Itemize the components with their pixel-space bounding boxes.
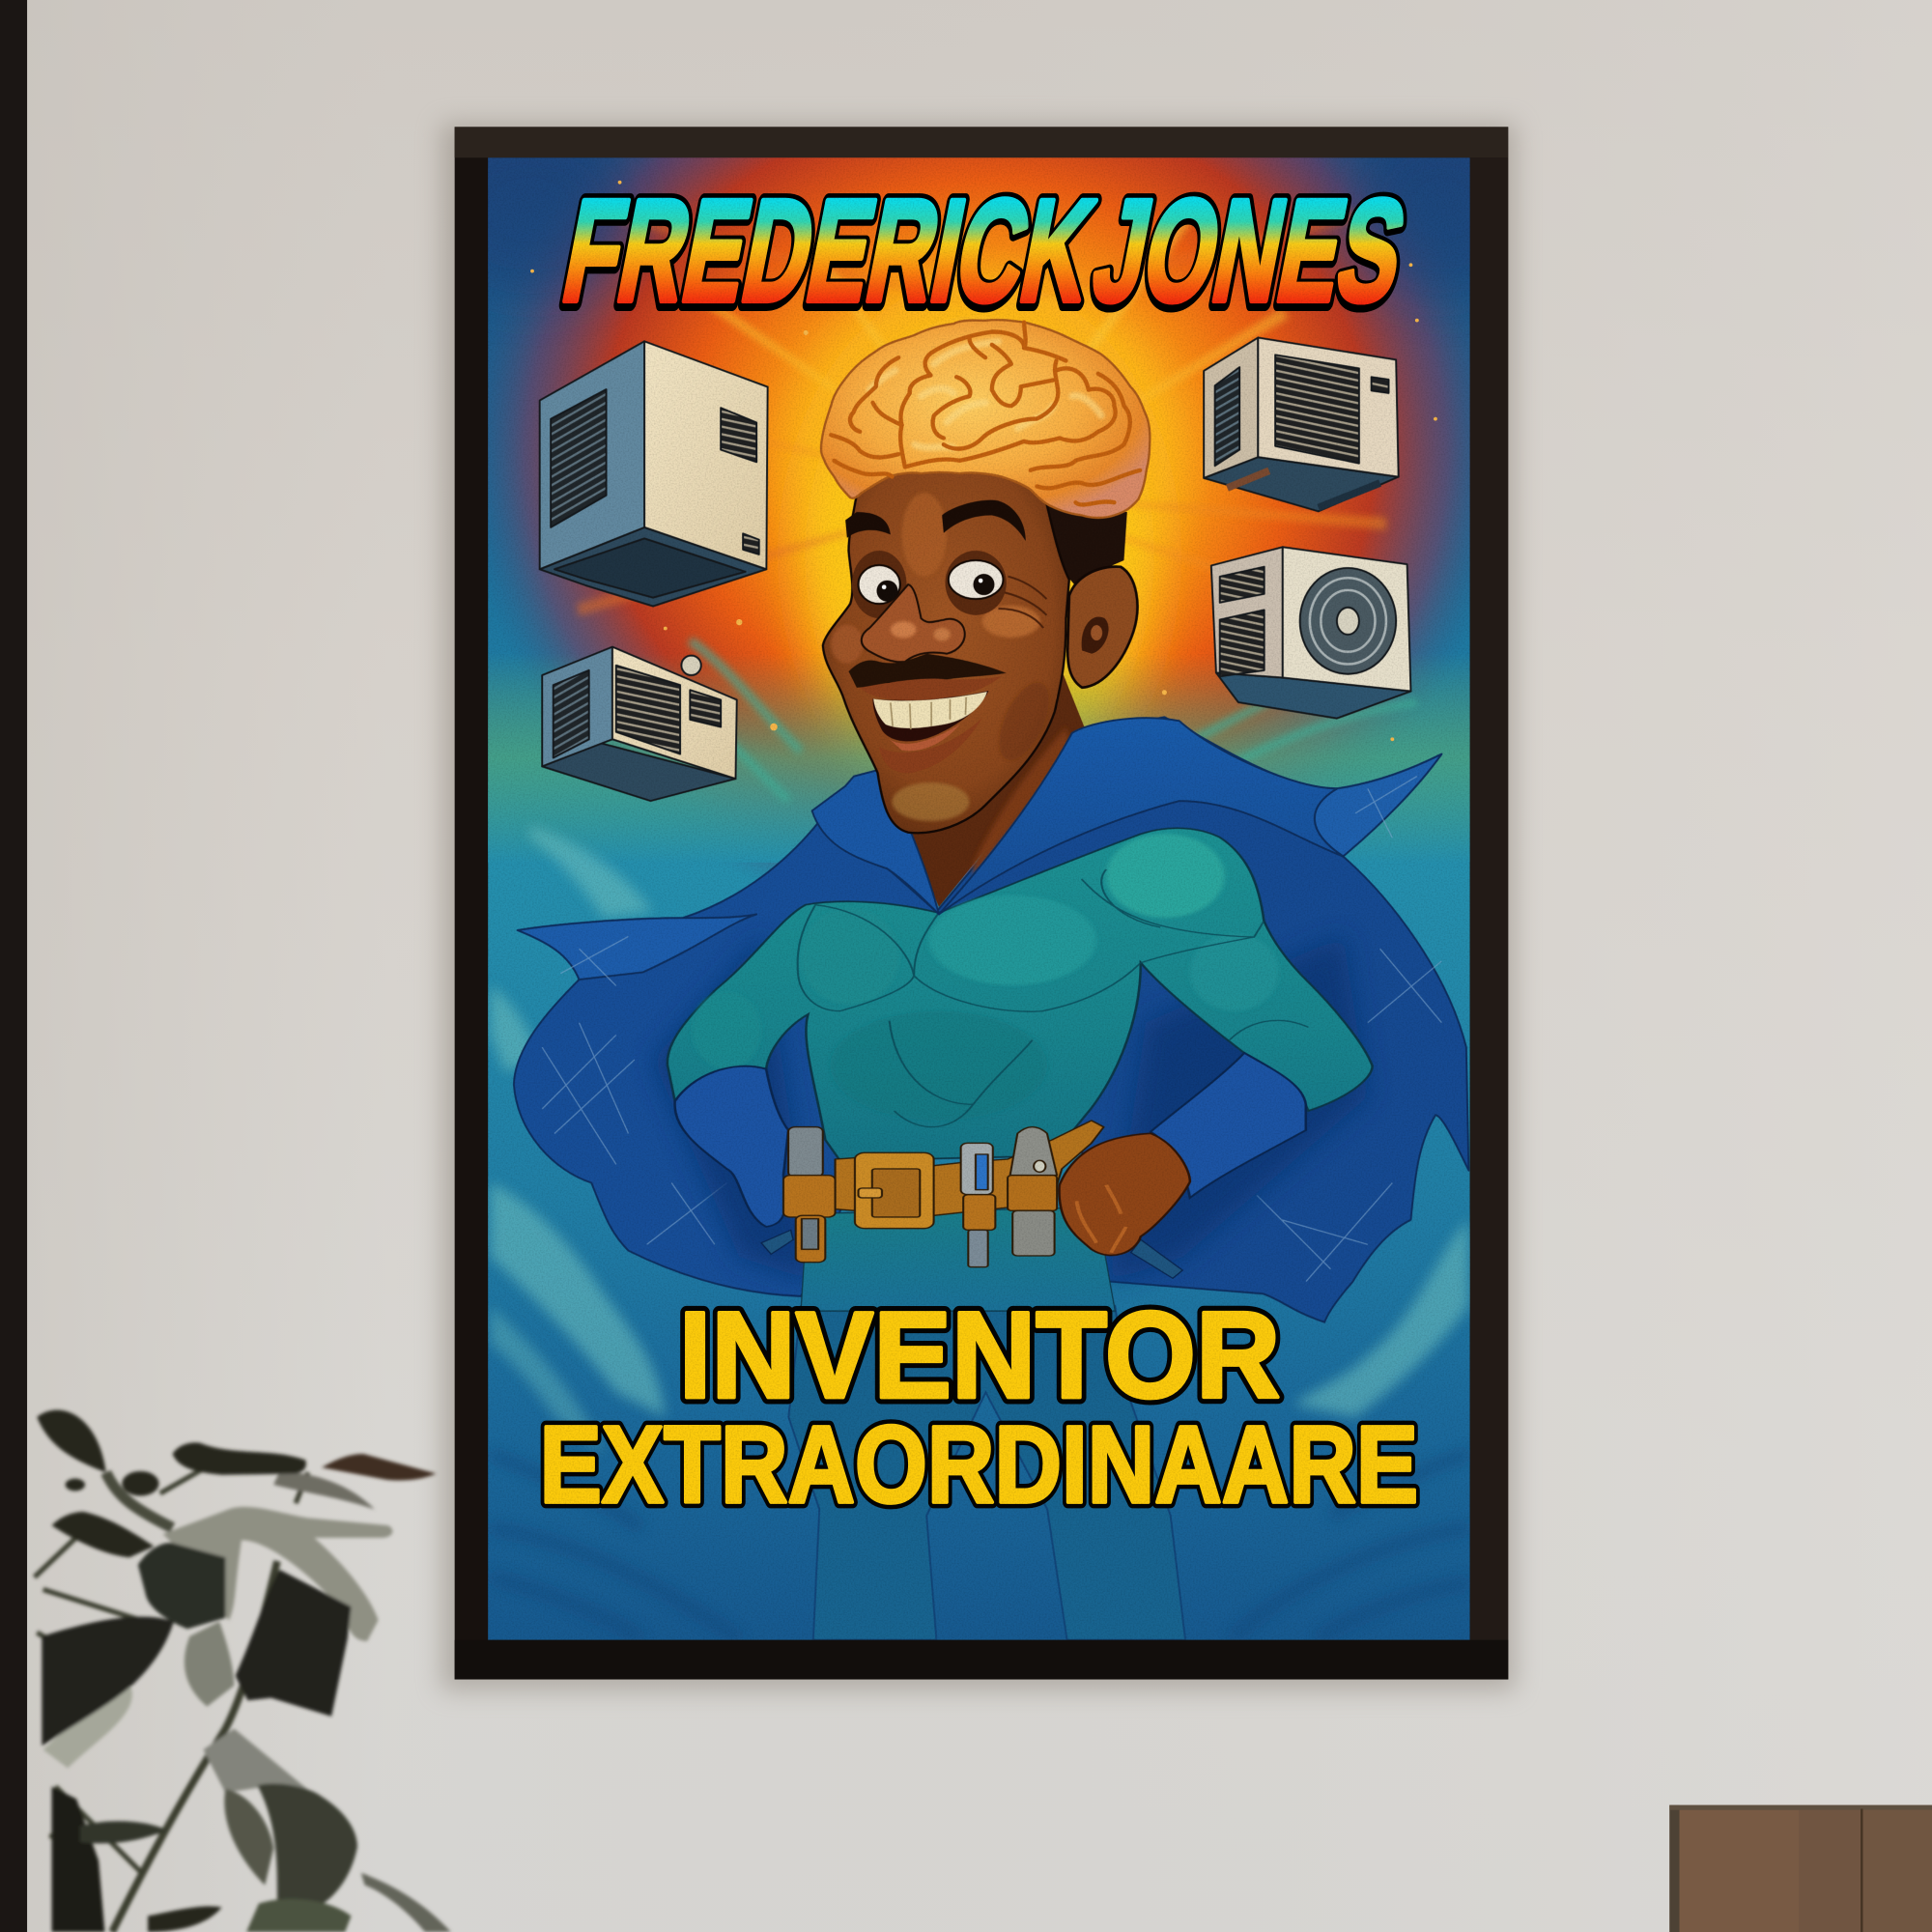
right glove xyxy=(1151,1053,1306,1198)
cape: collar xyxy=(812,718,1343,914)
torso group xyxy=(668,828,1373,1278)
air conditioner: middle right xyxy=(1211,547,1410,719)
yellow halo behind head xyxy=(775,478,1182,771)
title xyxy=(558,191,1406,313)
slogan line 1 outline: INVENTOR xyxy=(679,1287,1280,1424)
hand knuckle highlights xyxy=(1077,1185,1126,1253)
air conditioner: bottom left xyxy=(542,647,737,801)
picture frame xyxy=(455,127,1508,1680)
torso and arms xyxy=(668,828,1373,1161)
sunburst xyxy=(488,157,1470,908)
lower dark waves xyxy=(493,1450,1470,1589)
stars xyxy=(530,181,1437,741)
mustache xyxy=(848,654,1007,688)
muscle highlights xyxy=(693,834,1279,1121)
air conditioner: top left xyxy=(540,341,768,607)
left glove xyxy=(675,1066,788,1227)
top corners darkening xyxy=(488,157,1470,315)
muscle lines xyxy=(798,869,1308,1127)
lower lip xyxy=(879,718,982,773)
frame shadow xyxy=(441,124,1516,1690)
brain mass xyxy=(821,320,1150,518)
mouth interior xyxy=(872,691,988,741)
nose xyxy=(862,584,965,662)
tool belt xyxy=(783,1121,1104,1267)
lip inner xyxy=(886,724,959,751)
faded legs xyxy=(788,1306,1185,1640)
cape: back xyxy=(514,717,1468,1322)
plant xyxy=(35,1410,451,1932)
left eye xyxy=(852,551,906,618)
mouth xyxy=(860,676,1002,773)
wooden object xyxy=(1669,1805,1932,1932)
belt buckle xyxy=(855,1152,934,1229)
fan xyxy=(1300,568,1396,674)
left pouch tool xyxy=(783,1127,836,1263)
right eyebrow xyxy=(942,500,1026,541)
silver tool xyxy=(1008,1127,1057,1256)
slogan line 1: INVENTOR xyxy=(679,1287,1280,1424)
brain fold lines xyxy=(831,322,1140,504)
eye wrinkles xyxy=(998,577,1046,628)
upper lip xyxy=(860,676,1002,700)
ear xyxy=(1067,567,1137,688)
green teal fade below burst xyxy=(488,653,1470,863)
belt strap xyxy=(836,1121,1104,1215)
center tool xyxy=(961,1143,995,1267)
neck xyxy=(894,666,1084,907)
title outline: FREDERICK JONES xyxy=(552,170,1417,335)
teeth xyxy=(873,692,987,728)
neck highlight xyxy=(974,727,1072,877)
teal streaks xyxy=(640,640,1417,801)
right eye xyxy=(945,551,1007,615)
pelvis xyxy=(801,1208,1115,1311)
plant: pale leaves xyxy=(43,1471,451,1932)
face highlights xyxy=(831,493,1060,821)
hair xyxy=(1031,502,1127,586)
brain fold highlights xyxy=(869,341,1101,447)
plant: dark leaves xyxy=(37,1410,437,1932)
face xyxy=(823,447,1069,833)
cape: inner shadow xyxy=(653,936,1368,1282)
superhero figure xyxy=(514,320,1468,1640)
poster xyxy=(488,157,1470,1640)
cape: blueprint sketch lines xyxy=(542,777,1441,1282)
head group xyxy=(823,447,1137,833)
plant: stems xyxy=(35,1468,308,1932)
left eyebrow xyxy=(845,512,891,538)
paper grain xyxy=(488,157,1470,1640)
right hand xyxy=(1059,1133,1190,1255)
clouds xyxy=(491,826,1468,1454)
slogan line 2: EXTRAORDINAARE xyxy=(540,1404,1418,1526)
brain xyxy=(821,320,1150,518)
poster background xyxy=(488,157,1470,1640)
slogan line 2 outline: EXTRAORDINAARE xyxy=(540,1404,1418,1526)
air conditioner: top right xyxy=(1204,337,1399,511)
title fill: FREDERICK JONES xyxy=(553,169,1417,331)
slogan xyxy=(540,1287,1418,1526)
sunburst rays xyxy=(577,210,1386,616)
left dark door edge xyxy=(0,0,27,1932)
tool sticks xyxy=(761,1230,1182,1278)
